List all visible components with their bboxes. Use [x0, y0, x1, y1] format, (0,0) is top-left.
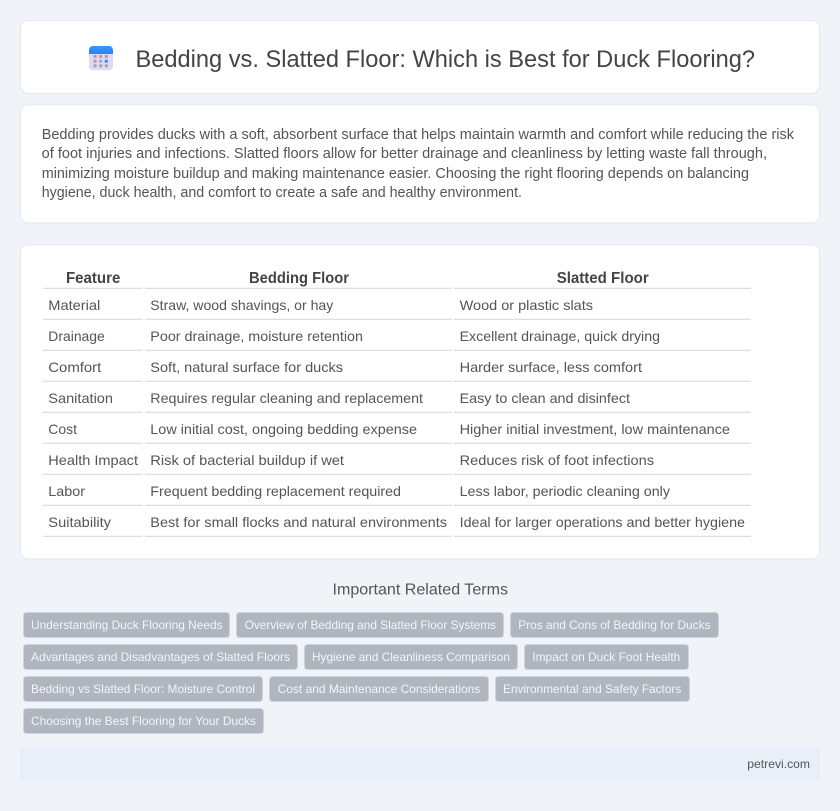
table row: suitability: Best for small flocks and natural environments	[150, 514, 447, 530]
table row: cost	[48, 421, 730, 437]
panel: introduction text	[20, 105, 820, 223]
tag: overview of systems	[236, 612, 504, 638]
panel: title header	[20, 20, 820, 94]
table row: comfort: Soft, natural surface for ducks	[150, 359, 343, 375]
tag: environmental and safety	[496, 676, 690, 702]
table row: comfort: Comfort	[48, 359, 101, 375]
tag: pros and cons: Pros and Cons of Bedding for Ducks	[518, 618, 710, 632]
table row: health impact: Reduces risk of foot infections	[460, 452, 654, 468]
tag: advantages and disadvantages	[24, 644, 298, 670]
table row: drainage: Drainage	[48, 328, 105, 344]
table row: comfort	[48, 359, 642, 375]
table row: material: Material	[48, 297, 100, 313]
related term tags	[24, 612, 718, 734]
tag: advantages and disadvantages: Advantages and Disadvantages of Slatted Floors	[31, 650, 290, 664]
footer bar	[20, 747, 820, 781]
table row: drainage: Poor drainage, moisture retention	[150, 328, 363, 344]
table row: suitability: Suitability	[48, 514, 111, 530]
table row: material	[48, 297, 593, 313]
tag: moisture control	[24, 676, 262, 702]
title: Bedding vs. Slatted Floor: Which is Best for Duck Flooring?	[136, 46, 755, 73]
tag: choosing the best flooring	[24, 708, 264, 734]
table row: health impact: Risk of bacterial buildup if wet	[150, 452, 344, 468]
tag: choosing the best flooring: Choosing the Best Flooring for Your Ducks	[31, 714, 256, 728]
table row: suitability	[48, 514, 745, 530]
text block: introduction paragraph	[42, 127, 795, 201]
table row: sanitation: Easy to clean and disinfect	[460, 390, 630, 406]
tag: foot health	[524, 644, 688, 670]
tag: overview of systems: Overview of Bedding and Slatted Floor Systems	[245, 618, 496, 632]
table row: health impact: Health Impact	[48, 452, 138, 468]
tag: cost and maintenance: Cost and Maintenance Considerations	[278, 682, 480, 696]
table header row	[66, 270, 649, 287]
tag: hygiene comparison: Hygiene and Cleanliness Comparison	[312, 650, 510, 664]
table row: sanitation: Sanitation	[48, 390, 113, 406]
table row: material: Wood or plastic slats	[460, 297, 593, 313]
text block: introduction paragraph: minimizing moisture buildup and making maintenance easier. Choosing the right flooring depends on balancing	[42, 166, 749, 182]
table row: cost: Cost	[48, 421, 77, 437]
table header row: Slatted Floor	[557, 270, 649, 287]
table row: comfort: Harder surface, less comfort	[460, 359, 642, 375]
table row: labor: Less labor, periodic cleaning only	[460, 483, 670, 499]
table row: health impact	[48, 452, 654, 468]
footer source text: petrevi.com	[747, 757, 810, 771]
heading: important related terms: Important Related Terms	[332, 582, 508, 598]
tag: pros and cons	[510, 612, 718, 638]
panel: comparison table	[20, 245, 820, 559]
table row: sanitation	[48, 390, 630, 406]
table row: sanitation: Requires regular cleaning and replacement	[150, 390, 423, 406]
table row: labor: Labor	[48, 483, 85, 499]
tag: hygiene comparison	[304, 644, 518, 670]
table row: labor: Frequent bedding replacement required	[150, 483, 401, 499]
table row: material: Straw, wood shavings, or hay	[150, 297, 333, 313]
tag: cost and maintenance	[270, 676, 488, 702]
icon: calendar	[89, 46, 113, 70]
text block: introduction paragraph: of foot injuries and infections. Slatted floors allow for better drainage and cleanliness by letting waste fall through,	[42, 146, 767, 162]
text block: introduction paragraph: hygiene, duck health, and comfort to create a safe and healthy environment.	[42, 185, 522, 201]
table row: cost: Higher initial investment, low maintenance	[460, 421, 730, 437]
table row: drainage	[48, 328, 660, 344]
tag: environmental and safety: Environmental and Safety Factors	[503, 682, 681, 696]
tag: moisture control: Bedding vs Slatted Floor: Moisture Control	[31, 682, 255, 696]
table row: cost: Low initial cost, ongoing bedding expense	[150, 421, 417, 437]
tag: understanding duck flooring needs	[24, 612, 230, 638]
tag: understanding duck flooring needs: Understanding Duck Flooring Needs	[31, 618, 222, 632]
table header row: Feature	[66, 270, 120, 287]
table row: suitability: Ideal for larger operations and better hygiene	[460, 514, 745, 530]
text block: introduction paragraph: Bedding provides ducks with a soft, absorbent surface that helps maintain warmth and comfort while reducing the risk	[42, 127, 795, 143]
table header row: Bedding Floor	[249, 270, 349, 287]
table row: labor	[48, 483, 670, 499]
table row: drainage: Excellent drainage, quick drying	[460, 328, 660, 344]
tag: foot health: Impact on Duck Foot Health	[532, 650, 680, 664]
